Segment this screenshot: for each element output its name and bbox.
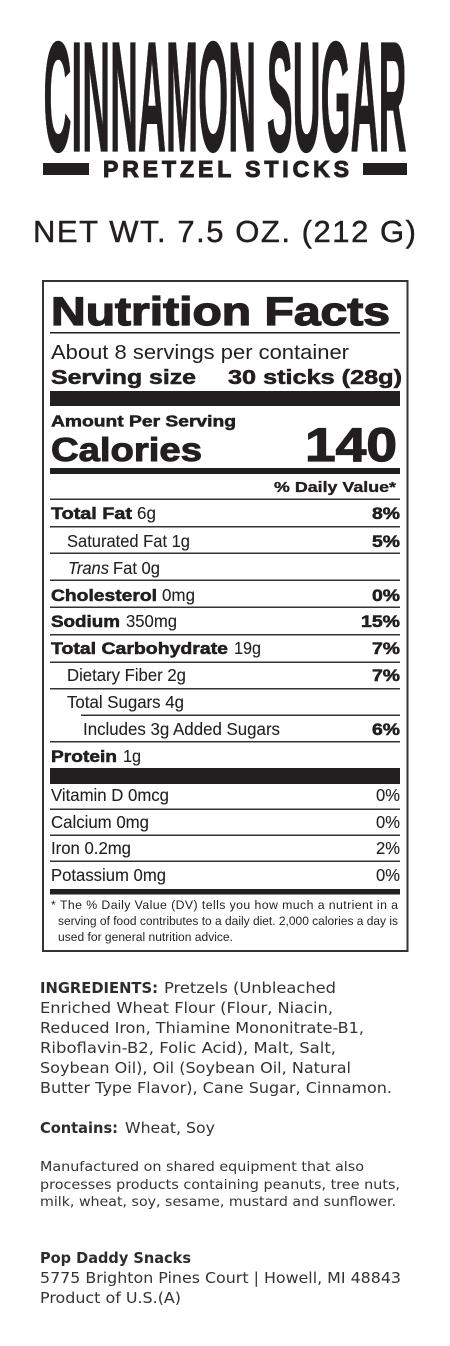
row: dietary fiber: 7%: [372, 666, 400, 685]
ingredients: [40, 979, 392, 1097]
footnote: *: [51, 898, 56, 912]
allergens: [40, 1119, 215, 1137]
row: total carbohydrate: [51, 638, 400, 658]
row: trans fat: Fat 0g: [113, 558, 160, 578]
row: potassium: [51, 865, 400, 885]
row: sodium: 350mg: [126, 611, 177, 631]
heading: nutrition facts: Nutrition Facts: [51, 290, 390, 334]
ingredients: Riboflavin-B2, Folic Acid), Malt, Salt,: [40, 1039, 336, 1057]
row: iron: 2%: [376, 838, 400, 858]
row: total fat: 8%: [372, 504, 400, 523]
company address: [40, 1249, 401, 1307]
row: dietary fiber: [67, 665, 400, 685]
calories: 140: [305, 418, 397, 471]
row: total sugars: Total Sugars 4g: [67, 692, 184, 712]
row: sodium: 15%: [361, 612, 400, 631]
shared equipment notice: milk, wheat, soy, sesame, mustard and sunflower.: [40, 1194, 396, 1210]
row: saturated fat: [67, 531, 400, 551]
row: dietary fiber: Dietary Fiber 2g: [67, 665, 186, 685]
row: vitamin d: [51, 785, 400, 805]
row: sodium: [51, 611, 400, 631]
calories: [51, 418, 397, 471]
row: potassium: Potassium 0mg: [51, 865, 166, 885]
row: protein: [51, 746, 141, 766]
row: total carbohydrate: 19g: [234, 638, 261, 658]
row: trans fat: [68, 558, 160, 578]
serving size: 30 sticks (28g): [228, 366, 402, 389]
footnote: serving of food contributes to a daily diet. 2,000 calories a day is: [58, 914, 398, 928]
row: total fat: [51, 503, 400, 523]
subtitle: pretzel sticks with side bars: [43, 156, 407, 182]
shared equipment notice: processes products containing peanuts, tree nuts,: [40, 1177, 400, 1193]
serving size: [51, 366, 402, 389]
row: saturated fat: 5%: [372, 532, 400, 551]
row: saturated fat: Saturated Fat 1g: [67, 531, 190, 551]
allergens: Contains:: [40, 1119, 118, 1137]
row: protein: Protein: [51, 747, 117, 766]
panel: nutrition facts: [43, 281, 408, 951]
ingredients: INGREDIENTS:: [40, 979, 158, 997]
calories: Calories: [51, 432, 202, 469]
row: added sugars: 6%: [372, 720, 400, 739]
row: cholesterol: 0%: [372, 586, 400, 605]
row: calcium: [51, 812, 400, 832]
row: vitamin d: 0%: [376, 785, 400, 805]
subtitle: pretzel sticks with side bars: PRETZEL STICKS: [103, 156, 349, 182]
ingredients: Enriched Wheat Flour (Flour, Niacin,: [40, 999, 333, 1017]
company address: Product of U.S.(A): [40, 1289, 181, 1307]
row: added sugars: [83, 719, 400, 739]
row: sodium: Sodium: [51, 612, 120, 631]
shared equipment notice: Manufactured on shared equipment that also: [40, 1159, 364, 1175]
row: potassium: 0%: [376, 865, 400, 885]
servings per container: About 8 servings per container: [51, 341, 349, 364]
row: iron: [51, 838, 400, 858]
allergens: Wheat, Soy: [125, 1119, 215, 1137]
row: added sugars: Includes 3g Added Sugars: [83, 719, 280, 739]
ingredients: Pretzels (Unbleached: [164, 979, 336, 997]
row: vitamin d: Vitamin D 0mcg: [51, 785, 169, 805]
company address: 5775 Brighton Pines Court | Howell, MI 48843: [40, 1269, 401, 1287]
amount per serving: Amount Per Serving: [51, 414, 236, 430]
serving size: Serving size: [51, 366, 196, 389]
ingredients: Reduced Iron, Thiamine Mononitrate-B1,: [40, 1019, 364, 1037]
footnote: The % Daily Value (DV) tells you how much a nutrient in a: [60, 898, 398, 912]
row: iron: Iron 0.2mg: [51, 838, 131, 858]
footnote: used for general nutrition advice.: [58, 930, 233, 944]
row: protein: 1g: [123, 746, 141, 766]
row: calcium: 0%: [376, 812, 400, 832]
row: total carbohydrate: Total Carbohydrate: [51, 639, 228, 658]
row: cholesterol: Cholesterol: [51, 586, 157, 605]
row: total fat: Total Fat: [51, 504, 132, 523]
row: trans fat: Trans: [68, 558, 109, 578]
ingredients: Soybean Oil), Oil (Soybean Oil, Natural: [40, 1059, 351, 1077]
row: cholesterol: [51, 585, 400, 605]
footnote: [51, 898, 398, 944]
net weight: NET WT. 7.5 OZ. (212 G): [33, 214, 416, 249]
daily value header: % Daily Value*: [274, 480, 396, 496]
row: calcium: Calcium 0mg: [51, 812, 149, 832]
row: total fat: 6g: [137, 503, 156, 523]
ingredients: Butter Type Flavor), Cane Sugar, Cinnamon.: [40, 1079, 392, 1097]
company address: Pop Daddy Snacks: [40, 1249, 191, 1267]
row: cholesterol: 0mg: [162, 585, 195, 605]
shared equipment notice: [40, 1159, 400, 1210]
row: total carbohydrate: 7%: [372, 639, 400, 658]
